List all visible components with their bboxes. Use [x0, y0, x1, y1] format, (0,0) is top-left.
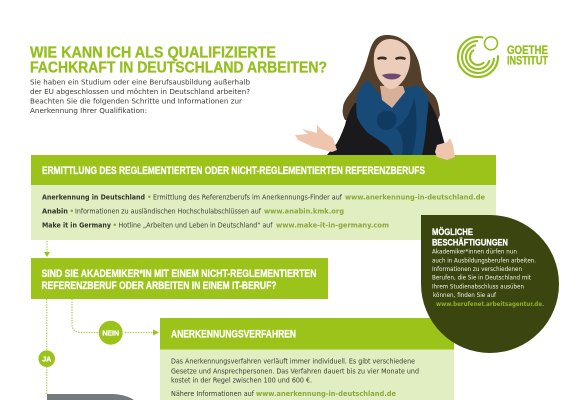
- arrow: no path: [72, 299, 159, 336]
- arrow: yes path: [46, 299, 48, 394]
- panel body: Anerkennung in Deutschland: [42, 192, 145, 202]
- panel body: Gesetze und Ansprechpersonen. Das Verfahren dauert bis zu vier Monate und: [171, 366, 419, 376]
- callout: possible employment: Akademiker*innen dürfen nun: [432, 248, 517, 256]
- panel header: [31, 155, 496, 185]
- panel body: Hotline „Arbeiten und Leben in Deutschland“ auf: [118, 220, 273, 230]
- panel header: [160, 318, 454, 350]
- callout: possible employment: BESCHÄFTIGUNGEN: [432, 238, 508, 248]
- arrow: panel to question: [44, 241, 50, 257]
- panel body: [160, 350, 454, 400]
- panel body: Informationen zu ausländischen Hochschulabschlüssen auf: [75, 206, 261, 216]
- callout: possible employment: Informationen zu verschiedenen: [432, 265, 522, 273]
- panel header: ERMITTLUNG DES REGLEMENTIERTEN ODER NICHT-REGLEMENTIERTEN REFERENZBERUFS: [42, 165, 425, 177]
- panel body: kostet in der Regel zwischen 100 und 600 €.: [171, 376, 312, 385]
- intro text: Beachten Sie die folgenden Schritte und Informationen zur: [30, 96, 242, 105]
- panel body: •: [147, 192, 152, 202]
- panel body: Make it in Germany: [42, 220, 111, 230]
- badge: NEIN: NEIN: [102, 330, 119, 338]
- callout: possible employment: www.berufenet.arbeitsagentur.de: [436, 300, 542, 308]
- question box: [31, 258, 328, 299]
- panel body: www.make-it-in-germany.com: [276, 220, 389, 230]
- panel body: Das Anerkennungsverfahren verläuft immer individuell. Es gibt verschiedene: [171, 357, 416, 366]
- panel body: •: [70, 206, 74, 216]
- intro text: Anerkennung Ihrer Qualifikation:: [30, 106, 147, 115]
- icon: Goethe-Institut logo: GOETHE: [507, 45, 548, 57]
- question box: REFERENZBERUF ODER ARBEITEN IN EINEM IT-BERUF?: [42, 280, 277, 292]
- intro text: Sie haben ein Studium oder eine Berufsausbildung außerhalb: [30, 78, 250, 86]
- question box: SIND SIE AKADEMIKER*IN MIT EINEM NICHT-REGLEMENTIERTEN: [42, 268, 317, 280]
- panel body: [31, 185, 496, 240]
- callout: possible employment: .: [542, 300, 544, 308]
- badge: JA: [38, 350, 55, 367]
- intro text: [30, 78, 250, 115]
- title: WIE KANN ICH ALS QUALIFIZIERTE: [30, 44, 276, 62]
- panel body: Ermittlung des Referenzberufs im Anerkennungs-Finder auf: [153, 192, 342, 202]
- panel body: •: [112, 220, 117, 230]
- panel body: www.anerkennung-in-deutschland.de: [256, 389, 396, 398]
- callout: possible employment: Berufen, die Sie in Deutschland mit: [432, 274, 531, 282]
- badge: JA: JA: [42, 356, 51, 363]
- panel body: Nähere Informationen auf: [171, 389, 254, 398]
- illustration: woman with blue scarf: [295, 35, 455, 160]
- panel: recognition procedure: [160, 318, 454, 400]
- callout: possible employment: auch in Ausbildungsberufen arbeiten.: [432, 256, 536, 264]
- callout: possible employment: [421, 215, 559, 353]
- panel body: www.anabin.kmk.org: [264, 206, 344, 216]
- badge: NEIN: [99, 321, 123, 345]
- next step box, cropped: [47, 394, 134, 400]
- callout: possible employment: können, finden Sie auf: [433, 291, 497, 299]
- callout: possible employment: Ihrem Studienabschluss ausüben: [432, 282, 524, 290]
- icon: Goethe-Institut logo: [458, 37, 548, 77]
- panel body: www.anerkennung-in-deutschland.de: [345, 192, 485, 202]
- panel header: ANERKENNUNGSVERFAHREN: [171, 328, 296, 340]
- panel body: Anabin: [42, 206, 68, 216]
- icon: Goethe-Institut logo: INSTITUT: [507, 56, 548, 68]
- panel: reference profession: [31, 155, 496, 240]
- title: FACHKRAFT IN DEUTSCHLAND ARBEITEN?: [30, 60, 327, 76]
- title: [30, 44, 327, 76]
- intro text: der EU abgeschlossen und möchten in Deutschland arbeiten?: [30, 87, 250, 96]
- callout: possible employment: MÖGLICHE: [432, 227, 473, 237]
